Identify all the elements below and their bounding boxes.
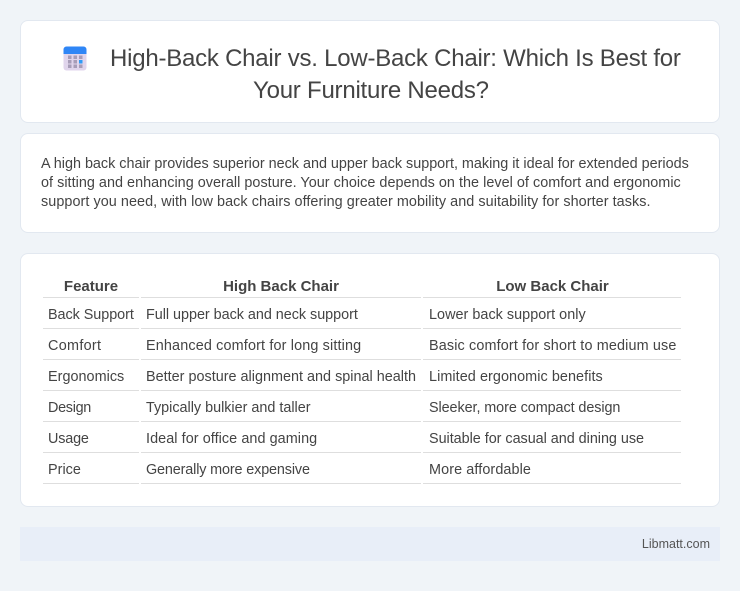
row: Back Support: Back Support <box>48 307 134 323</box>
footer bar <box>20 527 720 561</box>
text: Limited ergonomic benefits <box>429 369 603 385</box>
row: Usage: Usage <box>48 431 89 447</box>
row: Price: Price <box>48 462 81 478</box>
panel: title card <box>20 20 720 123</box>
text: Typically bulkier and taller <box>146 400 310 416</box>
header: High Back Chair: High Back Chair <box>223 278 339 295</box>
intro text: A high back chair provides superior neck and upper back support, making it ideal for extended periods <box>41 156 689 172</box>
text: More affordable <box>429 462 531 478</box>
text: Basic comfort for short to medium use <box>429 338 677 354</box>
text: Ideal for office and gaming <box>146 431 317 447</box>
intro text: support you need, with low back chairs offering greater mobility and suitability for shorter tasks. <box>41 194 651 210</box>
text: Better posture alignment and spinal health <box>146 369 416 385</box>
row: Design: Design <box>48 400 91 416</box>
icon: calendar <box>64 46 86 70</box>
text: Generally more expensive <box>146 462 310 478</box>
row: Ergonomics: Ergonomics <box>48 369 124 385</box>
intro text: of sitting and enhancing overall posture. Your choice depends on the level of comfort and ergonomic <box>41 175 681 191</box>
title <box>110 45 681 104</box>
text: Enhanced comfort for long sitting <box>146 338 361 354</box>
panel: intro card <box>20 133 720 233</box>
footer credit: Libmatt.com <box>642 537 710 551</box>
row: Comfort: Comfort <box>48 338 101 354</box>
text: Full upper back and neck support <box>146 307 358 323</box>
intro text <box>41 156 689 210</box>
text: Sleeker, more compact design <box>429 400 620 416</box>
title: Your Furniture Needs? <box>253 77 489 104</box>
text: Lower back support only <box>429 307 586 323</box>
header: Low Back Chair: Low Back Chair <box>496 278 609 295</box>
header: Feature: Feature <box>64 278 118 295</box>
text: Suitable for casual and dining use <box>429 431 644 447</box>
title: High-Back Chair vs. Low-Back Chair: Which Is Best for <box>110 45 681 72</box>
panel: comparison table card <box>20 253 720 507</box>
